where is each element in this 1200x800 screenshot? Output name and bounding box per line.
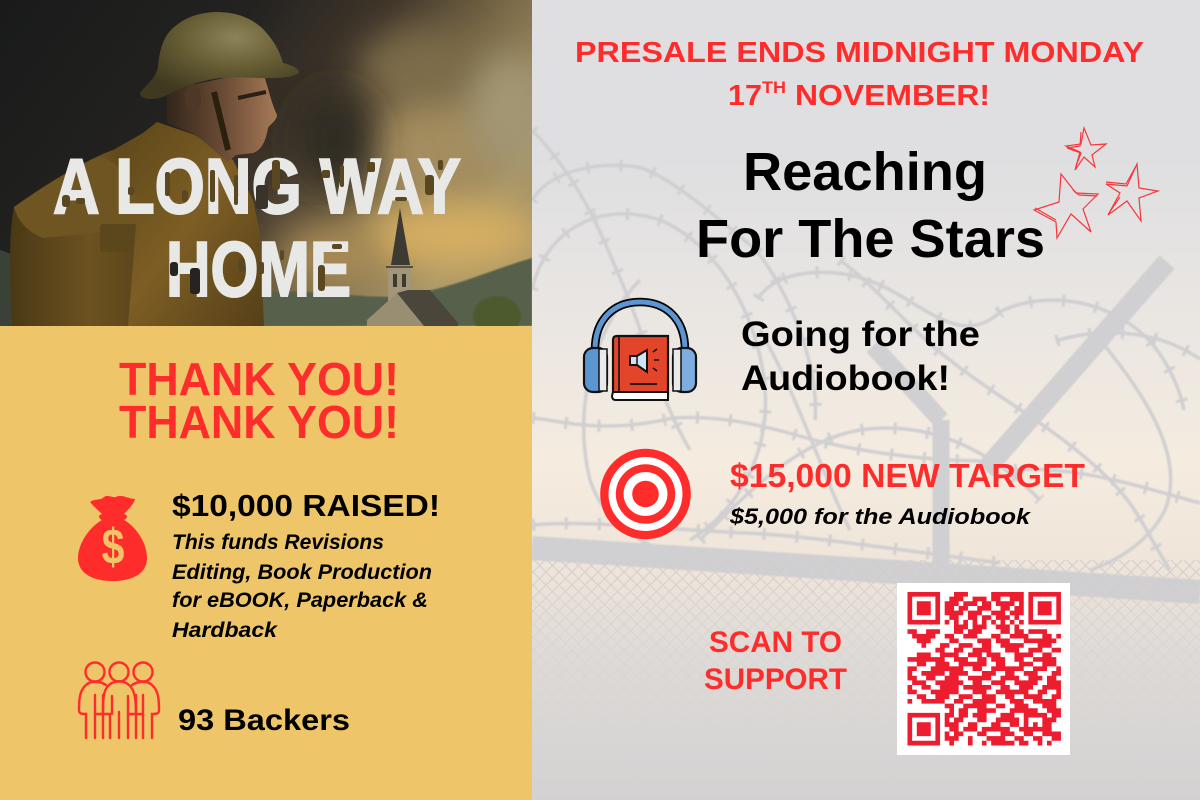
fence post and rail bbox=[532, 262, 1200, 592]
church bbox=[367, 208, 458, 326]
icon: three people bbox=[79, 662, 159, 738]
text: what funds cover: Hardback bbox=[172, 619, 278, 642]
panel: right background with barbed wire bbox=[532, 0, 1200, 800]
text: new target: $15,000 NEW TARGET bbox=[730, 457, 1085, 494]
panel: left yellow background bbox=[0, 326, 532, 800]
text: what funds cover: This funds Revisions bbox=[172, 531, 384, 554]
text: scan to support: SCAN TO bbox=[709, 626, 842, 659]
text: amount raised: $10,000 RAISED! bbox=[172, 488, 440, 523]
text: going for the audiobook: Going for the bbox=[741, 315, 980, 354]
heading: presale deadline: 17 bbox=[728, 80, 762, 112]
heading: reaching for the stars bbox=[696, 142, 1045, 269]
panel: cover photo bbox=[0, 0, 550, 336]
title: A LONG WAY HOME bbox=[53, 158, 462, 298]
QR code bbox=[897, 583, 1070, 755]
heading: presale deadline: TH bbox=[762, 78, 786, 97]
heading: presale deadline: PRESALE ENDS MIDNIGHT MONDAY bbox=[575, 37, 1144, 69]
heading: thank you: THANK YOU! bbox=[119, 396, 399, 448]
text: what funds cover: for eBOOK, Paperback & bbox=[172, 589, 428, 612]
soldier bbox=[10, 12, 299, 326]
text: audiobook cost: $5,000 for the Audiobook bbox=[729, 504, 1032, 529]
icon: target bbox=[600, 449, 691, 539]
text: going for the audiobook bbox=[741, 315, 980, 398]
hills bbox=[0, 250, 532, 326]
heading: reaching for the stars: Reaching bbox=[743, 142, 987, 202]
heading: presale deadline: NOVEMBER! bbox=[795, 80, 990, 112]
icon: hand-drawn stars bbox=[1034, 128, 1158, 238]
icon: money bag bbox=[78, 496, 147, 581]
chain-link fence bbox=[532, 560, 1200, 634]
jacket bbox=[113, 122, 264, 326]
text: scan to support: SUPPORT bbox=[704, 663, 847, 696]
icon: money bag: $ bbox=[102, 519, 124, 575]
heading: presale deadline bbox=[575, 37, 1144, 112]
neck and face bbox=[167, 70, 277, 162]
heading: thank you: THANK YOU! bbox=[119, 353, 399, 405]
heading: thank you bbox=[119, 353, 399, 448]
backpack bbox=[10, 150, 143, 326]
text: going for the audiobook: Audiobook! bbox=[741, 359, 950, 398]
text: scan to support bbox=[704, 626, 847, 696]
text: backers: 93 Backers bbox=[178, 704, 350, 737]
helmet bbox=[140, 12, 299, 99]
barbed wire coils bbox=[532, 130, 1200, 570]
text: what funds cover: Editing, Book Production bbox=[172, 561, 432, 584]
title: A LONG WAY HOME: HOME bbox=[166, 225, 351, 313]
title: A LONG WAY HOME: A LONG WAY bbox=[53, 142, 461, 230]
heading: reaching for the stars: For The Stars bbox=[696, 209, 1045, 269]
clouds bbox=[280, 30, 550, 280]
text: what funds cover bbox=[172, 531, 432, 642]
icon: audiobook headphones bbox=[584, 302, 696, 400]
